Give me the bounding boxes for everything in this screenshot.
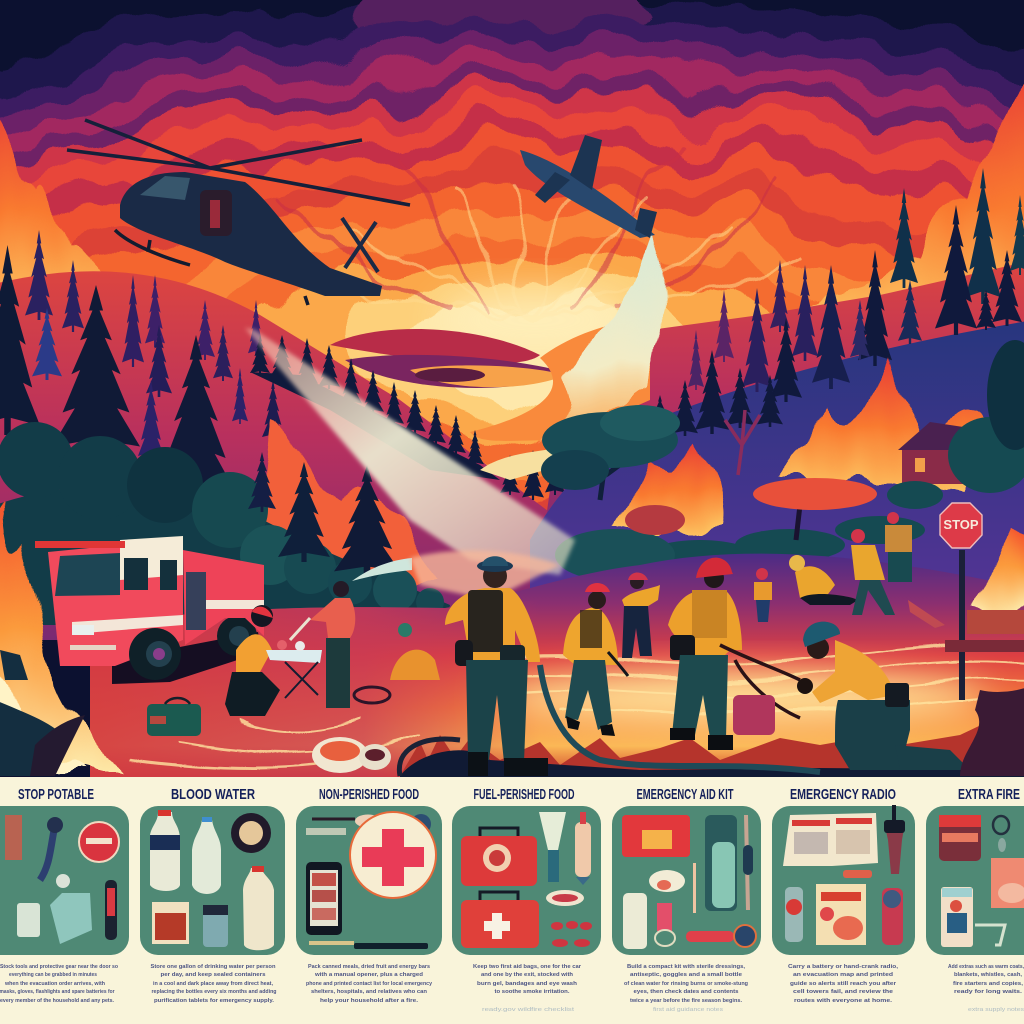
- hose spray: [352, 558, 412, 581]
- distant firefighter, crouching: [789, 555, 858, 605]
- fire on the left of truck: [0, 500, 125, 772]
- ground: [90, 554, 1024, 780]
- panel 3 text: [306, 964, 433, 1004]
- jar: [941, 887, 973, 947]
- wrench: [40, 825, 55, 880]
- panel 6 text: an evacuation map and printed: [793, 972, 894, 978]
- small dish: [411, 814, 431, 834]
- wrench head: [47, 817, 63, 833]
- panel 1 heading: STOP POTABLE: [18, 786, 94, 803]
- panel 7: extras: [926, 806, 1024, 955]
- panel 4: medical bags: [452, 806, 601, 955]
- red case: [622, 815, 690, 857]
- distant firefighter, walking: [851, 529, 895, 615]
- firefighter 1, blue helmet standing: [445, 556, 548, 776]
- shadow under truck: [112, 632, 262, 684]
- coiled hose on ground: [354, 687, 390, 703]
- bottle one: [150, 810, 180, 891]
- open door with crew: [200, 190, 232, 236]
- phone: [306, 862, 342, 935]
- skids: [115, 230, 308, 305]
- magazine: [816, 884, 866, 945]
- right hillside: [530, 322, 1024, 588]
- hillside flames: [612, 357, 984, 536]
- fire engine: [35, 536, 264, 684]
- flashlight bar: [309, 941, 428, 949]
- panel 6 text: [788, 964, 899, 1004]
- panel 4 text: [473, 964, 582, 1013]
- panel 5 text: first aid guidance notes: [653, 1007, 724, 1013]
- bumper: [70, 645, 116, 650]
- red eyewear: [843, 870, 872, 878]
- scene: wildfire sky and forest: [0, 0, 1024, 780]
- flame-lit tree canopy: [625, 478, 877, 540]
- headlight: [72, 625, 94, 635]
- panel 1 text: [0, 964, 119, 1004]
- red case: [939, 815, 981, 861]
- conifers along right ridge: [648, 168, 1024, 439]
- panel 1 text: every member of the household and any pets.: [0, 998, 114, 1004]
- kneeling firefighter at table: [225, 605, 280, 716]
- foreground plant, left: [0, 650, 85, 776]
- bandage roll: [623, 893, 647, 949]
- ground glow: [490, 672, 990, 724]
- panel 2 text: in a cool and dark place away from direct heat,: [153, 981, 273, 987]
- crew highlight: [210, 200, 220, 228]
- central horizon glow: [440, 292, 630, 348]
- panel 4 text: and one by the exit, stocked with: [481, 972, 574, 978]
- crouched firefighter, distant: [390, 623, 440, 680]
- flames: upper left edge: [0, 120, 101, 282]
- panel 6 text: Carry a battery or hand-crank radio,: [788, 964, 899, 970]
- panel 2: water: [140, 806, 285, 955]
- water beam: [245, 328, 575, 575]
- distant red forest haze, left: [0, 271, 560, 640]
- panel 3: first aid circle: [296, 806, 442, 955]
- folding table: [266, 640, 322, 698]
- tool handle: [746, 815, 748, 910]
- kneeling firefighter 5, blue helmet: [797, 622, 970, 770]
- panel 2 heading: BLOOD WATER: [171, 786, 255, 803]
- panel 3 text: with a manual opener, plus a charged: [314, 972, 424, 978]
- stop sign: [940, 503, 982, 700]
- panel 4 text: Keep two first aid bags, one for the car: [473, 964, 582, 970]
- clip: [657, 903, 672, 931]
- panel 3 heading: NON-PERISHED FOOD: [319, 786, 419, 803]
- panel 7 text: fire starters and copies,: [953, 981, 1023, 987]
- grass fringe: [402, 726, 979, 774]
- panel 1 text: Stock tools and protective gear near the door so: [0, 964, 119, 970]
- green gear bag: [147, 698, 201, 736]
- white stripe: [72, 615, 183, 634]
- foreground plant, right: [960, 680, 1024, 776]
- red cross badge: [350, 812, 436, 898]
- firefighter with hose, salmon shirt: [290, 581, 355, 708]
- red bag upper: [461, 828, 537, 886]
- canister: [882, 888, 903, 945]
- bottle two: [192, 817, 221, 894]
- valley ridges and lake: [330, 318, 650, 441]
- bowl: [649, 870, 685, 892]
- central treeline: [250, 335, 565, 500]
- panel 1 text: everything can be grabbed in minutes: [9, 972, 97, 978]
- flashlight band: [107, 888, 115, 916]
- panel 2 text: purification tablets for emergency supply.: [154, 998, 274, 1004]
- distant firefighter, small standing: [754, 568, 772, 622]
- panel 2 text: Store one gallon of drinking water per person: [150, 964, 276, 970]
- panel 3 text: phone and printed contact list for local emergency: [306, 981, 433, 987]
- radio: [884, 805, 905, 874]
- panel 5 text: Build a compact kit with sterile dressings,: [627, 964, 745, 970]
- hose spray haze: [410, 551, 560, 600]
- tail rotor: [342, 218, 378, 272]
- bare tree on hillside: [725, 410, 760, 475]
- teal bushes right: [555, 340, 1024, 581]
- coiled clip: [975, 925, 1005, 945]
- open book: [783, 813, 878, 866]
- panel 7 text: ready for long waits.: [954, 989, 1023, 995]
- panel 2 text: [150, 964, 277, 1004]
- panel 5 text: twice a year before the fire season begins.: [630, 998, 742, 1004]
- water drop stream from plane: [540, 235, 664, 445]
- firefighter 4, red helmet: [668, 558, 800, 750]
- water flask: [705, 815, 737, 911]
- far trees, left side: [25, 230, 284, 460]
- fuselage: [120, 172, 382, 296]
- panel 7 text: blankets, whistles, cash,: [954, 972, 1022, 978]
- panel 7 text: [948, 964, 1024, 1013]
- cockpit glass: [140, 176, 190, 200]
- rotor blades: [67, 120, 410, 205]
- panel 1: tools: [0, 806, 129, 955]
- panel 2 text: replacing the bottles every six months and adding: [152, 989, 277, 995]
- ointment row: [551, 921, 592, 947]
- bowl: [231, 813, 271, 853]
- panel 5 text: of clean water for rinsing burns or smoke-stung: [624, 981, 749, 987]
- side window: [124, 558, 148, 590]
- oval plate: [546, 890, 584, 906]
- small winding river: [480, 450, 552, 480]
- bag of rations: [152, 902, 189, 944]
- clip loop: [655, 930, 675, 946]
- mask nozzle: [56, 874, 70, 888]
- panel 4 text: ready.gov wildfire checklist: [482, 1007, 575, 1013]
- sky with flame bands: [0, 0, 1024, 780]
- panel 2 text: per day, and keep sealed containers: [160, 972, 266, 978]
- air tanker plane: [520, 135, 657, 238]
- large dark conifers, left: [0, 245, 235, 499]
- spoon: [312, 814, 381, 828]
- panel 3 text: Pack canned meals, dried fruit and energy bars: [308, 964, 430, 970]
- flames: upper right edge: [810, 84, 1024, 306]
- firefighter 2, red helmet walking: [563, 583, 628, 736]
- badge: [79, 822, 119, 862]
- firefighter 3, distant with chainsaw: [622, 572, 660, 658]
- bottom dark foreground band: [400, 750, 1024, 778]
- booklet: [991, 858, 1024, 908]
- forest floor with flames behind the beam: [250, 420, 440, 580]
- red cabin: [898, 422, 963, 484]
- flashlight: [105, 880, 117, 940]
- large jug: [243, 866, 274, 950]
- tool grip: [743, 845, 753, 875]
- front wheel: [129, 628, 181, 680]
- gear cache by the boots: [733, 695, 775, 735]
- distant firefighter, far: [885, 512, 912, 582]
- stop sign: STOP: [943, 517, 979, 532]
- lamp: [5, 815, 22, 860]
- white upper cab: [120, 536, 183, 580]
- panel 6 heading: EMERGENCY RADIO: [790, 786, 896, 803]
- panel 4 heading: FUEL-PERISHED FOOD: [474, 786, 575, 803]
- ground red tint, left side: [90, 607, 504, 777]
- panel 4 text: burn gel, bandages and eye wash: [477, 981, 578, 987]
- windshield: [55, 553, 120, 596]
- panel 5 heading: EMERGENCY AID KIT: [636, 786, 734, 803]
- distant forest haze, right: [546, 265, 1024, 513]
- cab: [48, 540, 183, 666]
- helicopter: [67, 120, 410, 305]
- panel 3 text: shelters, hospitals, and relatives who can: [311, 989, 428, 995]
- jar: [203, 905, 228, 947]
- panel 6 text: routes with everyone at home.: [794, 998, 893, 1004]
- whistle tag: [998, 838, 1006, 852]
- ground heat streaks: [130, 645, 1024, 769]
- panel 7 text: extra supply notes: [968, 1007, 1024, 1013]
- main hose: [540, 665, 820, 772]
- hose coils on ground: [399, 739, 460, 776]
- label bar: [306, 828, 346, 835]
- panel 6 text: cell towers fail, and review the: [793, 989, 893, 995]
- panel 4 text: to soothe smoke irritation.: [494, 989, 570, 995]
- light bar: [35, 541, 125, 548]
- panel 5 text: eyes, then check dates and contents: [634, 989, 738, 995]
- panel 5 text: [624, 964, 749, 1013]
- rear wheel: [217, 616, 257, 656]
- panel 6 text: guide so alerts still reach you after: [790, 981, 897, 987]
- tall canister: [575, 812, 591, 885]
- panel 5 text: antiseptic, goggles and a small bottle: [630, 972, 742, 978]
- acacia tree: [541, 405, 680, 500]
- tube: [539, 812, 566, 882]
- panel 3 text: help your household after a fire.: [320, 998, 419, 1004]
- teal bushes left: [0, 422, 450, 625]
- roll: [17, 903, 40, 937]
- panel 6: guide and radio: [772, 805, 915, 955]
- panel 5: aid kit: [612, 806, 761, 955]
- swab: [693, 863, 696, 913]
- red bag lower: [461, 892, 539, 948]
- goggles: [686, 925, 756, 947]
- mask: [50, 893, 92, 944]
- bottle: [785, 887, 803, 942]
- panel 1 text: masks, gloves, flashlights and spare batteries for: [0, 989, 115, 995]
- panel 1 text: when the evacuation order arrives, with: [4, 981, 106, 987]
- camp bowls: [312, 737, 391, 773]
- whistle loop: [993, 816, 1009, 834]
- rear body: [183, 550, 264, 645]
- front conifers: [248, 452, 400, 577]
- burning woodpile and flames, right: [908, 525, 1024, 652]
